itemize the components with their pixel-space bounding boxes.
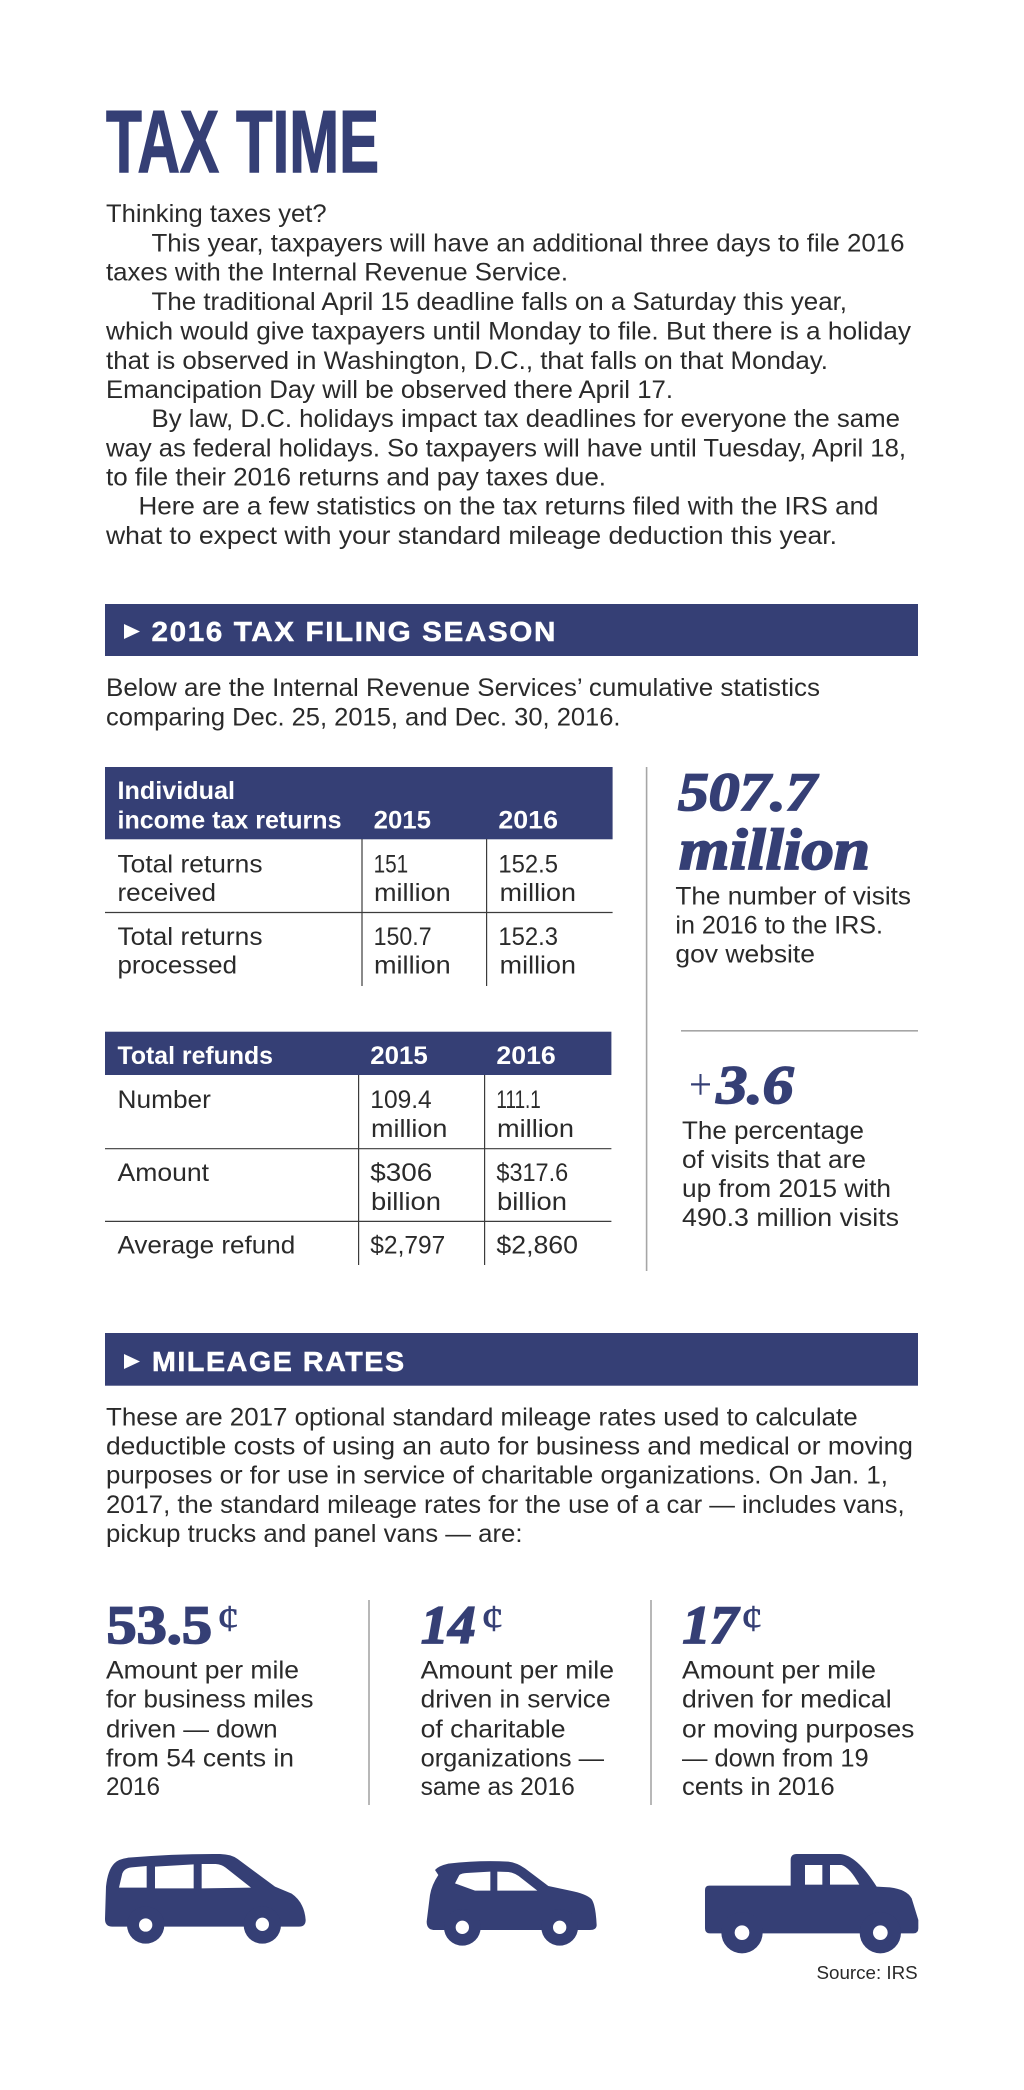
section banner: 2016 tax filing season: 2016 TAX FILING SEASON [152, 616, 557, 647]
callout: 507.7 million visits: in 2016 to the IRS. [675, 912, 883, 940]
title: TAX [106, 92, 219, 191]
mileage intro text [106, 1404, 913, 1548]
intro text block: The traditional April 15 deadline falls on a Saturday this year, [152, 288, 847, 316]
rate: 17 cents medical: — down from 19 [682, 1745, 869, 1773]
intro text block: way as federal holidays. So taxpayers will have until Tuesday, April 18, [105, 434, 906, 462]
table: individual income tax returns: million [374, 879, 451, 907]
table: total refunds: Amount [118, 1159, 209, 1187]
table: individual income tax returns: 2016 [498, 807, 558, 835]
rate: 14 cents charity: ¢ [481, 1598, 504, 1640]
mileage intro text: 2017, the standard mileage rates for the use of a car — includes vans, [106, 1491, 905, 1519]
callout: +3.6 percent: of visits that are [682, 1146, 866, 1174]
table: individual income tax returns: million [500, 879, 576, 907]
table: total refunds: million [371, 1115, 447, 1143]
table: total refunds: Average refund [118, 1232, 295, 1260]
intro text block: Emancipation Day will be observed there April 17. [106, 376, 673, 404]
rate: 53.5 cents business: Amount per mile [106, 1656, 299, 1684]
intro text block: Thinking taxes yet? [106, 200, 327, 228]
rate: 14 cents charity: Amount per mile [421, 1656, 614, 1684]
callout: +3.6 percent: 490.3 million visits [682, 1204, 899, 1232]
section banner: mileage rates: MILEAGE RATES [152, 1346, 406, 1377]
table: total refunds: 109.4 [370, 1086, 432, 1114]
table: individual income tax returns [105, 767, 613, 986]
rate: 14 cents charity: 14 [421, 1595, 476, 1655]
callout: +3.6 percent: + [689, 1060, 712, 1109]
rate: 14 cents charity: same as 2016 [421, 1773, 575, 1801]
title: TIME [236, 92, 379, 191]
callout: 507.7 million visits: million [679, 817, 870, 882]
intro text block: to file their 2016 returns and pay taxes due. [106, 463, 606, 491]
table: total refunds: Number [118, 1086, 211, 1114]
rate: 17 cents medical: 17 [682, 1595, 740, 1655]
callout: +3.6 percent: The percentage [682, 1117, 864, 1145]
callout: +3.6 percent: up from 2015 with [682, 1175, 891, 1203]
table: total refunds: $2,860 [496, 1232, 578, 1260]
rate: 14 cents charity: organizations — [421, 1745, 604, 1773]
source note: Source: IRS [816, 1963, 918, 1983]
icon: hatchback car [427, 1861, 597, 1946]
table: individual income tax returns: 150.7 [374, 923, 432, 951]
callout: +3.6 percent [682, 1055, 899, 1232]
table: individual income tax returns: processed [118, 952, 237, 980]
rate: 17 cents medical: driven for medical [682, 1686, 892, 1714]
icon: minivan [105, 1854, 306, 1944]
table: individual income tax returns: 151 [374, 850, 408, 878]
table: total refunds: Total refunds [118, 1042, 273, 1070]
filing season intro text [106, 674, 820, 731]
rate: 53.5 cents business: for business miles [106, 1686, 314, 1714]
table: total refunds: 2015 [370, 1042, 428, 1070]
rate: 17 cents medical: Amount per mile [682, 1656, 876, 1684]
table: individual income tax returns: 2015 [374, 807, 431, 835]
table: total refunds: $317.6 [496, 1159, 568, 1187]
rate: 14 cents charity [421, 1595, 614, 1801]
section banner: mileage rates [105, 1333, 918, 1386]
rate: 53.5 cents business: driven — down [106, 1716, 278, 1744]
table: individual income tax returns: Total returns [118, 850, 262, 878]
rate: 17 cents medical [682, 1595, 914, 1801]
table: total refunds: $306 [370, 1159, 432, 1187]
rate: 53.5 cents business: 2016 [106, 1773, 160, 1801]
table: individual income tax returns: Total returns [118, 923, 262, 951]
table: total refunds: million [497, 1115, 574, 1143]
table: individual income tax returns: received [118, 879, 216, 907]
section banner: 2016 tax filing season [105, 604, 918, 656]
rate: 17 cents medical: or moving purposes [682, 1716, 914, 1744]
intro text block: By law, D.C. holidays impact tax deadlines for everyone the same [152, 405, 900, 433]
callout: 507.7 million visits: The number of visits [675, 882, 911, 910]
table: total refunds: billion [371, 1188, 441, 1216]
rate: 17 cents medical: ¢ [741, 1598, 763, 1640]
rate: 17 cents medical: cents in 2016 [682, 1773, 835, 1801]
callout: 507.7 million visits: 507.7 [678, 762, 819, 822]
table: total refunds: $2,797 [370, 1232, 445, 1260]
intro text block: taxes with the Internal Revenue Service. [106, 258, 568, 286]
title [106, 92, 379, 191]
table: total refunds [105, 1032, 611, 1265]
intro text block: Here are a few statistics on the tax returns filed with the IRS and [138, 493, 878, 521]
table: individual income tax returns: income tax returns [118, 807, 342, 835]
table: individual income tax returns: 152.3 [498, 923, 558, 951]
callout: 507.7 million visits: gov website [675, 940, 815, 968]
rate: 53.5 cents business: ¢ [217, 1598, 240, 1640]
table: individual income tax returns: Individual [118, 777, 235, 805]
filing season intro text: Below are the Internal Revenue Services’ cumulative statistics [106, 674, 820, 702]
rate: 53.5 cents business: 53.5 [106, 1595, 212, 1655]
table: total refunds: 2016 [496, 1042, 556, 1070]
rate: 53.5 cents business: from 54 cents in [106, 1745, 294, 1773]
table: individual income tax returns: million [374, 952, 451, 980]
mileage intro text: deductible costs of using an auto for business and medical or moving [106, 1433, 913, 1461]
callout: +3.6 percent: 3.6 [715, 1055, 794, 1115]
intro text block: what to expect with your standard mileage deduction this year. [105, 522, 837, 550]
intro text block: which would give taxpayers until Monday to file. But there is a holiday [105, 317, 912, 345]
icon: pickup truck [705, 1854, 918, 1953]
table: individual income tax returns: 152.5 [498, 850, 558, 878]
intro text block: This year, taxpayers will have an additional three days to file 2016 [152, 229, 904, 257]
table: total refunds: 111.1 [496, 1086, 541, 1114]
filing season intro text: comparing Dec. 25, 2015, and Dec. 30, 2016. [106, 703, 620, 731]
mileage intro text: These are 2017 optional standard mileage rates used to calculate [106, 1404, 858, 1432]
rate: 14 cents charity: of charitable [421, 1716, 566, 1744]
rate: 53.5 cents business [106, 1595, 314, 1801]
mileage intro text: pickup trucks and panel vans — are: [106, 1520, 522, 1548]
mileage intro text: purposes or for use in service of charitable organizations. On Jan. 1, [106, 1462, 888, 1490]
intro text block [105, 200, 912, 550]
callout: 507.7 million visits [675, 762, 911, 968]
table: total refunds: billion [497, 1188, 567, 1216]
intro text block: that is observed in Washington, D.C., that falls on that Monday. [106, 347, 828, 375]
rate: 14 cents charity: driven in service [421, 1686, 611, 1714]
table: individual income tax returns: million [500, 952, 576, 980]
